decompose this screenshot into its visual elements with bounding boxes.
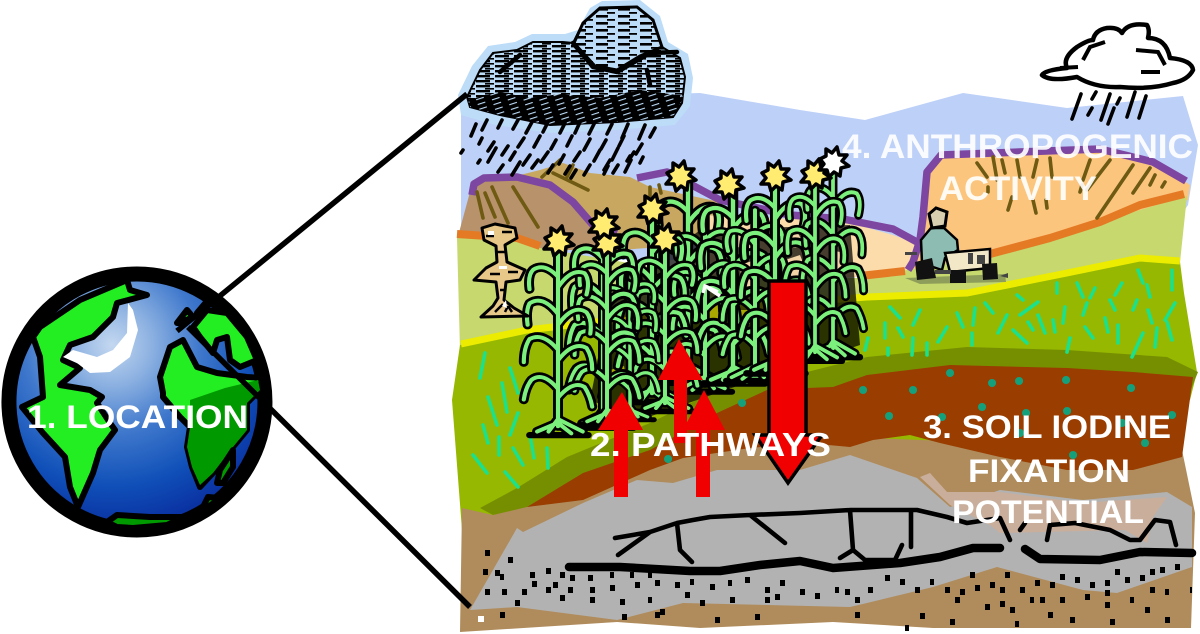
africa xyxy=(160,340,262,487)
light rain xyxy=(1072,92,1146,124)
big orange hill xyxy=(907,147,1190,275)
left brown hill xyxy=(457,178,620,250)
label: anthropogenic activity: ACTIVITY xyxy=(939,170,1097,208)
topsoil field xyxy=(452,259,1197,530)
gravel xyxy=(483,553,1192,628)
corn plant xyxy=(524,250,592,435)
connector line bottom xyxy=(188,327,470,607)
purple ridge lines xyxy=(472,149,1186,270)
corn plant xyxy=(575,248,639,425)
madagascar xyxy=(217,450,233,483)
white ice crescent xyxy=(63,303,138,373)
arrow up 2 xyxy=(658,339,703,443)
americas xyxy=(22,280,147,507)
cloud inner lines xyxy=(1060,42,1165,72)
tractor wheels xyxy=(915,258,998,283)
rain xyxy=(461,120,655,178)
black rock cracks xyxy=(569,510,1192,571)
corn plant xyxy=(569,230,637,428)
red-brown soil xyxy=(527,365,1193,507)
globe outline and ocean xyxy=(9,274,265,530)
icon: storm cloud xyxy=(458,0,693,178)
corn plant xyxy=(601,270,659,420)
cloud body xyxy=(467,7,685,125)
icon: globe xyxy=(9,274,265,530)
corn plant xyxy=(802,170,864,357)
label: soil iodine fixation potential: FIXATION xyxy=(968,453,1130,489)
peach patches xyxy=(695,225,845,287)
icon: wheat sheaf figure xyxy=(474,224,528,317)
corn field xyxy=(524,147,864,435)
small southern island xyxy=(203,497,220,508)
grey bedrock xyxy=(470,455,1192,620)
orange ridge lines xyxy=(457,194,1184,276)
red arrows xyxy=(598,281,822,497)
yellow line xyxy=(461,258,1180,344)
corn plant xyxy=(633,245,697,411)
eurasia xyxy=(193,310,257,367)
corn backdrop patches xyxy=(590,225,860,420)
corn plant xyxy=(741,180,809,373)
dark clutter behind corn xyxy=(590,225,860,420)
small islands xyxy=(177,310,193,323)
sky xyxy=(461,93,1198,260)
arrow down xyxy=(755,281,822,483)
icon: farmer on tractor xyxy=(905,208,1008,284)
hill furrows xyxy=(477,157,1165,227)
olive yellow patches xyxy=(610,305,806,380)
dark olive layer xyxy=(480,347,1198,515)
arrow up 1 xyxy=(598,392,643,497)
corn plant xyxy=(723,210,787,381)
farmer xyxy=(921,228,958,270)
pale green band xyxy=(457,196,1187,350)
cloud halo xyxy=(458,0,693,133)
tan subsoil xyxy=(460,436,1195,632)
ground shadow xyxy=(905,274,1006,284)
background hills xyxy=(457,147,1190,350)
africa darker south xyxy=(187,380,260,485)
tan hill xyxy=(520,163,760,250)
icon: small rain cloud xyxy=(1042,24,1193,124)
label: anthropogenic activity: 4. ANTHROPOGENIC xyxy=(842,128,1193,166)
top puff xyxy=(574,7,662,70)
label: pathways: 2. PATHWAYS xyxy=(590,426,831,463)
connector line top xyxy=(177,94,467,331)
antarctica xyxy=(107,515,183,528)
label: soil iodine fixation potential: 3. SOIL IODINE xyxy=(923,409,1171,445)
pale peach hill xyxy=(700,215,915,280)
cloud outlines xyxy=(500,43,677,85)
label: location: 1. LOCATION xyxy=(27,399,248,435)
small white figure in the corn xyxy=(703,286,720,296)
label: soil iodine fixation potential: POTENTIAL xyxy=(952,494,1144,530)
cloud outline xyxy=(1042,24,1193,88)
farmer head and cap xyxy=(929,208,947,228)
small white speck xyxy=(478,616,484,622)
tassels xyxy=(544,147,849,257)
pink clay patch xyxy=(920,473,1167,543)
corn plant xyxy=(618,215,686,402)
continents xyxy=(22,280,262,528)
tractor body xyxy=(945,249,990,272)
teal field flecks xyxy=(473,270,1175,487)
label: soil iodine fixation potential xyxy=(923,409,1171,530)
ground layers xyxy=(452,258,1198,632)
corn plant xyxy=(673,215,737,392)
tractor grille xyxy=(905,252,1008,278)
panel: landscape cross-section xyxy=(452,93,1198,632)
teal soil dots xyxy=(668,373,1172,459)
arrow up 3 xyxy=(683,390,725,497)
dense underside xyxy=(468,90,684,125)
label: anthropogenic activity xyxy=(842,128,1193,208)
corn plant xyxy=(784,180,846,361)
corn plant xyxy=(653,183,723,383)
corn plant xyxy=(697,190,769,383)
